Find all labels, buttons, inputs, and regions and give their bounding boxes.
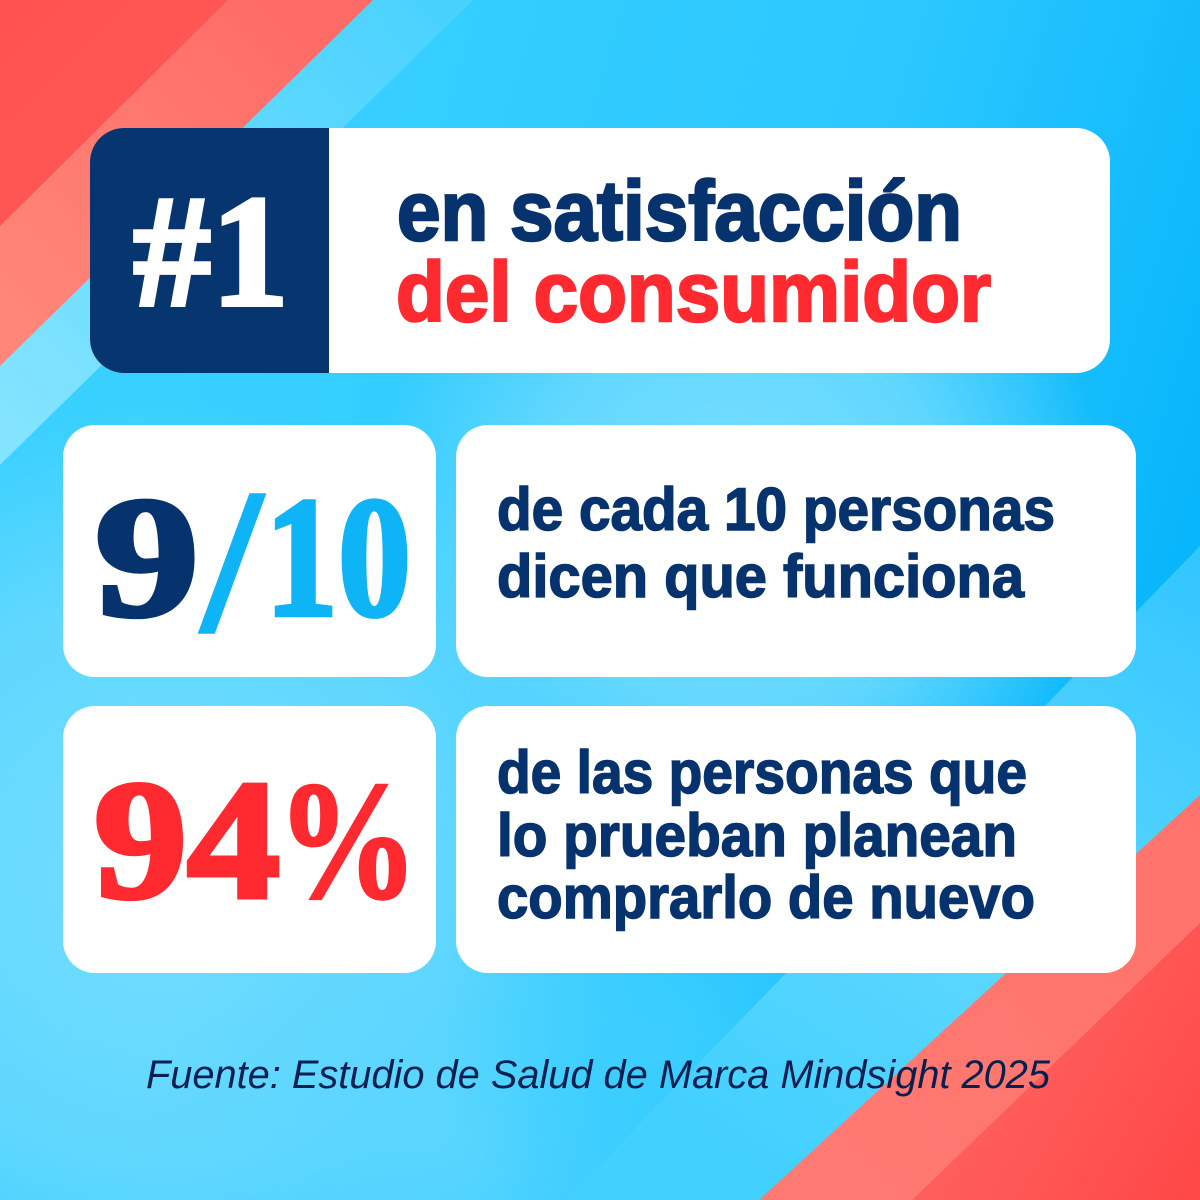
description text: comprarlo de nuevo [497,864,1035,931]
stat: 94%: % [277,748,418,934]
stat: 9/10: / [198,446,265,676]
heading text: en satisfacción [397,164,962,258]
source note: Fuente: Estudio de Salud de Marca Mindsight 2025 [146,1053,1051,1097]
stat: 94%: 94 [94,746,280,934]
stat: 9/10: 9 [95,463,199,653]
panel: 9/10 number [63,425,436,677]
stat: 94% [94,746,418,934]
heading text: del consumidor [396,245,991,339]
description text: lo prueban planean [497,802,1017,869]
stat: 9/10 [95,446,411,676]
badge: #1 [90,128,329,373]
description text: de cada 10 personas [497,476,1055,543]
description text [497,739,1035,931]
badge: #1: #1 [133,162,289,340]
stat: 9/10: 10 [265,463,411,653]
heading text [396,164,991,339]
description text [497,476,1055,610]
description text: de las personas que [497,739,1027,806]
panel: #1 headline [90,128,1110,373]
panel: 94% number [63,706,436,973]
panel: 9/10 description [456,425,1136,677]
description text: dicen que funciona [497,543,1025,610]
panel: 94% description [456,706,1136,973]
